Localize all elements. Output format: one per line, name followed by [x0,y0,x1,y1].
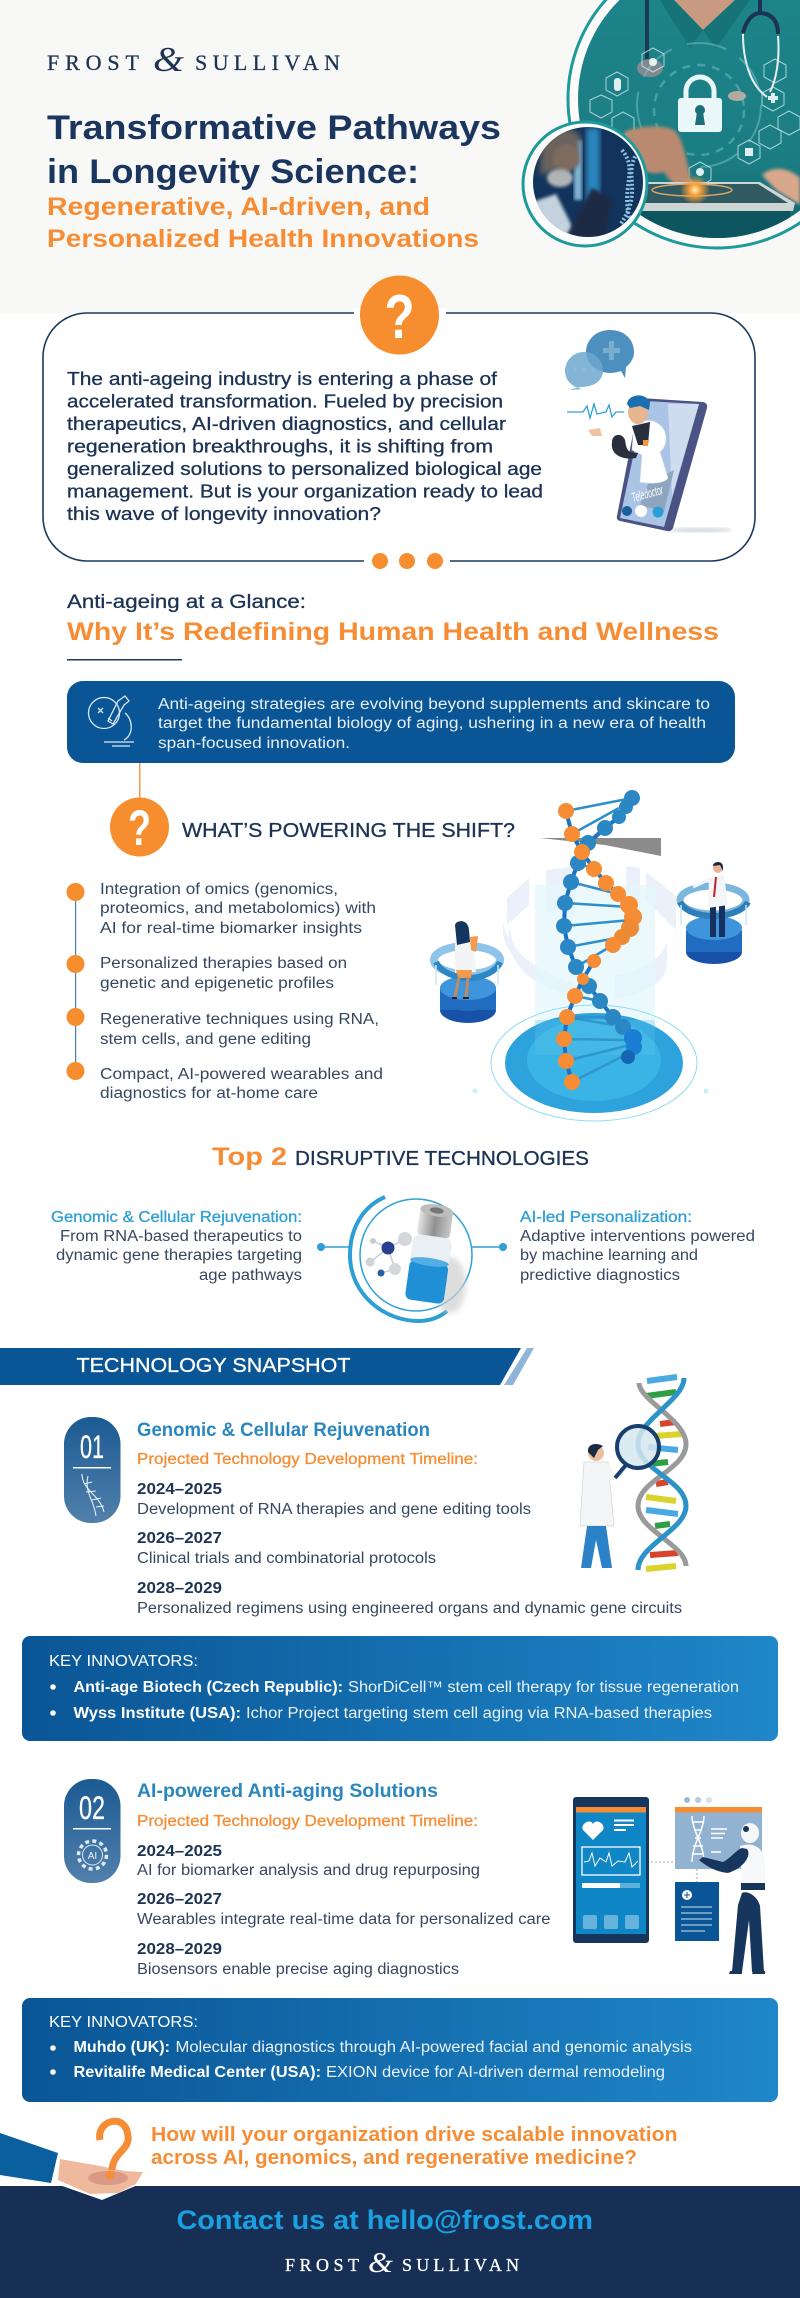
panel: key innovators 02: KEY INNOVATORS: [49,2014,198,2031]
timeline text 01: 2024–2025 [137,1481,222,1498]
block: AI-led personalization [520,1209,755,1284]
icon: floating hexagons [590,48,800,186]
timeline text 01 [137,1420,682,1617]
right scientist on pod [680,862,748,964]
icon: hand holding question mark [0,2121,143,2194]
intro text: management. But is your organization ready to lead [67,482,543,502]
timeline list: drivers: stem cells, and gene editing [100,1031,311,1048]
intro text: accelerated transformation. Fueled by precision [67,392,503,412]
timeline text 02: 2028–2029 [137,1941,222,1958]
rungs [564,798,632,1017]
timeline list: drivers: Compact, AI-powered wearables and [100,1066,383,1083]
card 01 [64,1377,686,1617]
contact line: Contact us at hello@frost.com [176,2205,593,2235]
timeline text 02: Biosensors enable precise aging diagnostics [137,1961,459,1978]
timeline text 02: Wearables integrate real-time data for personalized care [137,1911,550,1928]
timeline list: drivers: Regenerative techniques using RNA, [100,1011,379,1028]
subtitle [47,193,479,253]
block: genomic and cellular rejuvenation: Genomic & Cellular Rejuvenation: [51,1209,302,1226]
panel border [43,313,755,561]
icon: AI gear: AI [88,1851,97,1862]
timeline list: drivers: genetic and epigenetic profiles [100,975,334,992]
icon: padlock [678,77,722,132]
heading: top 2 disruptive technologies [212,1143,589,1171]
timeline text 01: Personalized regimens using engineered organs and dynamic gene circuits [137,1600,682,1617]
heading: what's powering the shift: WHAT’S POWERING THE SHIFT? [182,820,515,842]
illustration: DNA helix with scientists [434,790,748,1121]
icon: tele-doctor phone [565,330,732,532]
panel: definition banner: target the fundamental biology of aging, ushering in a new era of health [158,715,706,732]
timeline text 01: Clinical trials and combinatorial protocols [137,1550,436,1567]
block: AI-led personalization: predictive diagnostics [520,1267,680,1284]
heading: anti-ageing at a glance: Anti-ageing at a Glance: [67,592,306,613]
heading: what's powering the shift: ? [128,800,151,856]
panel: key innovators 01 [22,1636,778,1741]
footer band [0,2182,800,2298]
heading: anti-ageing at a glance [67,592,719,660]
callout: closing question [151,2124,678,2169]
card 02 [64,1779,765,1978]
panel: intro [43,276,755,569]
blue strand [556,790,642,1064]
panel: key innovators 02: EXION device for AI-driven dermal remodeling [326,2064,665,2081]
panel: key innovators 01: Anti-age Biotech (Czech Republic): [74,1679,343,1696]
panel: definition banner: Anti-ageing strategies are evolving beyond supplements and skincare to [158,696,710,713]
badge 02 [64,1779,120,1883]
timeline text 02: AI-powered Anti-aging Solutions [137,1781,438,1802]
panel: key innovators 01: Ichor Project targeting stem cell aging via RNA-based therapies [246,1705,712,1722]
panel: key innovators 02: Muhdo (UK): [74,2039,170,2056]
panel: key innovators 01: KEY INNOVATORS: [49,1653,198,1670]
footer logo: FROST [285,2255,359,2275]
timeline list: drivers: Personalized therapies based on [100,955,347,972]
block: AI-led personalization: AI-led Personalization: [520,1209,692,1226]
timeline text 01: Projected Technology Development Timeline: [137,1451,478,1468]
logo: Frost & Sullivan: SULLIVAN [195,50,340,75]
timeline text 02: 2026–2027 [137,1891,222,1908]
block: genomic and cellular rejuvenation: age pathways [199,1267,302,1284]
header photo: clinician with digital lock [568,0,800,250]
tablet [640,182,795,211]
banner: technology snapshot [0,1348,534,1385]
intro text: generalized solutions to personalized biological age [67,459,542,479]
left scientist on pod [434,921,500,1023]
panel: key innovators 02 [22,1998,778,2102]
timeline text 02 [137,1781,550,1978]
intro text: The anti-ageing industry is entering a phase of [67,369,498,389]
footer logo: SULLIVAN [402,2255,519,2275]
title: Transformative Pathways [47,109,501,147]
orange strand [556,803,642,1090]
heading: anti-ageing at a glance: Why It’s Redefining Human Health and Wellness [67,618,719,646]
connector line [139,763,140,799]
footer logo: & [368,2247,393,2279]
logo: Frost & Sullivan: FROST [47,50,140,75]
molecule [366,1232,412,1276]
icon: dna strand [82,1474,104,1516]
timeline text 01: Development of RNA therapies and gene editing tools [137,1501,531,1518]
block: AI-led personalization: Adaptive interventions powered [520,1228,755,1245]
intro text: therapeutics, AI-driven diagnostics, and cellular [67,414,506,434]
heading: top 2 disruptive technologies: DISRUPTIVE TECHNOLOGIES [295,1148,589,1170]
timeline list: drivers: Integration of omics (genomics, [100,881,338,898]
title [47,109,501,191]
footer logo [285,2247,519,2279]
small photo: scientist with DNA [523,122,647,246]
panel: definition banner [67,681,735,763]
header paper background [0,0,800,313]
badge 01 [64,1417,120,1523]
heading: top 2 disruptive technologies: Top 2 [212,1143,287,1171]
timeline text 01: 2028–2029 [137,1580,222,1597]
panel: key innovators 02: Molecular diagnostics through AI-powered facial and genomic analysis [176,2039,692,2056]
illustration: scientist with magnifier and DNA [580,1377,686,1570]
grey wedge [540,838,661,856]
timeline text 02: Projected Technology Development Timeline: [137,1813,478,1830]
illustration: tablet and AI robot [573,1797,765,1974]
subtitle: Regenerative, AI-driven, and [47,193,430,221]
timeline text 02: AI for biomarker analysis and drug repurposing [137,1862,480,1879]
intro text: this wave of longevity innovation? [67,504,381,524]
panel: definition banner: span-focused innovation. [158,735,350,752]
icon: question mark badge [360,276,439,354]
icon: vial in ring [317,1197,507,1321]
intro text: regeneration breakthroughs, it is shifting from [67,436,493,456]
block: genomic and cellular rejuvenation: From RNA-based therapeutics to [60,1228,302,1245]
title: in Longevity Science: [47,153,419,191]
panel: key innovators 02: Revitalife Medical Center (USA): [74,2064,321,2081]
heading: what's powering the shift [110,798,515,856]
badge 02: 02 [79,1790,105,1826]
holographic rings [503,866,676,998]
banner: technology snapshot: TECHNOLOGY SNAPSHOT [76,1354,351,1377]
panel: key innovators 01: Wyss Institute (USA): [74,1705,241,1722]
timeline list: drivers: diagnostics for at-home care [100,1085,318,1102]
subtitle: Personalized Health Innovations [47,225,479,253]
timeline list: drivers [66,881,383,1102]
block: genomic and cellular rejuvenation [51,1209,302,1284]
three dots [372,553,443,569]
timeline text 01: Genomic & Cellular Rejuvenation [137,1420,430,1441]
badge 01: 01 [80,1429,104,1465]
timeline text 02: 2024–2025 [137,1843,222,1860]
intro text [67,369,543,524]
timeline list: drivers: AI for real-time biomarker insights [100,920,362,937]
timeline text 01: 2026–2027 [137,1530,222,1547]
block: genomic and cellular rejuvenation: dynamic gene therapies targeting [56,1247,302,1264]
block: AI-led personalization: by machine learning and [520,1247,698,1264]
callout: closing question: How will your organization drive scalable innovation [151,2124,678,2146]
icon: microscope [88,696,134,746]
callout: closing question: across AI, genomics, and regenerative medicine? [151,2147,637,2169]
logo: Frost & Sullivan: & [153,40,185,79]
icon: question mark badge: ? [384,283,414,352]
timeline list: drivers: proteomics, and metabolomics) with [100,900,376,917]
platform [491,1005,697,1121]
panel: key innovators 01: ShorDiCell™ stem cell therapy for tissue regeneration [348,1679,739,1696]
vial [405,1202,457,1304]
hand pressing tablet [624,126,692,186]
icon: tele-doctor phone: Teledoctor [630,482,665,505]
logo: Frost & Sullivan [47,40,340,79]
